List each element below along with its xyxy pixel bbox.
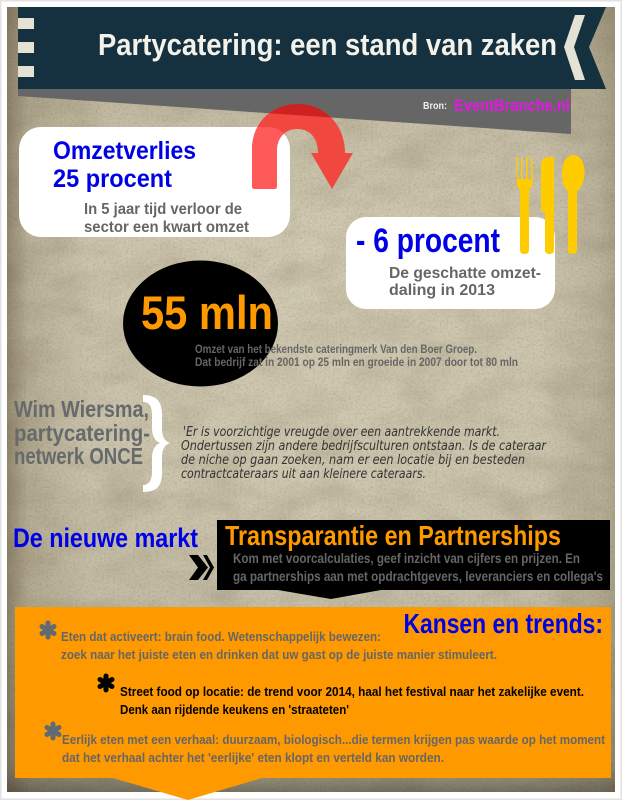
icon: banner chevron [564, 15, 585, 80]
panel: kansen en trends [15, 607, 611, 800]
heading: transparantie: Transparantie en Partnerships [225, 520, 561, 551]
quote text: Ondertussen zijn andere bedrijfsculturen ontstaan. Is de cateraar [181, 439, 547, 454]
text: van den boer groep: Omzet van het bekendste cateringmerk Van den Boer Groep. [195, 344, 477, 356]
stat: 55 mln: 55 mln [141, 286, 273, 339]
text: street food: Street food op locatie: de trend voor 2014, haal het festival naar het zakelijke event. [120, 684, 584, 699]
heading: omzetverlies: Omzetverlies [53, 137, 196, 165]
text: brain food: zoek naar het juiste eten en drinken dat uw gast op de juiste manier stimuleert. [61, 647, 497, 662]
quote text: de niche op gaan zoeken, nam er een locatie bij en besteden [181, 453, 525, 468]
text: omzetverlies: In 5 jaar tijd verloor de [84, 201, 242, 218]
text: eerlijk eten: dat het verhaal achter het 'eerlijke' eten klopt en verteld kan worden. [62, 750, 444, 765]
source credit: EventBranche.nl [454, 96, 570, 115]
icon: knife [541, 157, 554, 254]
icon: cutlery [516, 155, 584, 254]
text: min 6 procent [389, 265, 541, 299]
icon: fork [516, 157, 532, 254]
heading: wim wiersma [14, 396, 150, 469]
text: van den boer groep: Dat bedrijf zat in 2001 op 25 mln en groeide in 2007 door tot 80 mln [195, 357, 518, 369]
heading: omzetverlies [53, 137, 196, 193]
black circle [123, 260, 278, 386]
panel: transparantie en partnerships [217, 520, 610, 599]
text: omzetverlies: sector een kwart omzet [84, 219, 250, 236]
icon: double chevron [189, 555, 214, 580]
heading: de nieuwe markt: De nieuwe markt [13, 523, 198, 553]
icon: asterisk 3 [47, 724, 59, 738]
text: brain food: Eten dat activeert: brain food. Wetenschappelijk bewezen: [61, 629, 381, 644]
icon: white brace [143, 395, 170, 492]
icon: asterisk 1 [42, 623, 54, 637]
icon: spoon [562, 155, 584, 254]
grey source band [18, 89, 571, 134]
text: min 6 procent: daling in 2013 [389, 282, 495, 299]
text: street food: Denk aan rijdende keukens en 'straateten' [120, 702, 349, 717]
banner stripes [18, 18, 34, 77]
text: street food [120, 684, 584, 717]
heading: wim wiersma: Wim Wiersma, [14, 396, 149, 422]
panel: min 6 procent [346, 217, 555, 309]
title: Partycatering: een stand van zaken [98, 27, 557, 62]
icon: asterisk 2 [100, 676, 112, 690]
quote text: 'Er is voorzichtige vreugde over een aantrekkende markt. [183, 425, 500, 440]
heading: omzetverlies: 25 procent [53, 165, 173, 193]
icon: red curved arrow [252, 104, 353, 189]
text: brain food [61, 629, 497, 662]
text: omzetverlies [84, 201, 250, 236]
source credit: Bron: [423, 101, 447, 112]
title banner [18, 7, 606, 89]
text: van den boer groep [195, 344, 518, 369]
heading: wim wiersma: netwerk ONCE [14, 443, 143, 469]
heading: min 6 procent: - 6 procent [356, 222, 500, 260]
text: min 6 procent: De geschatte omzet- [389, 265, 541, 282]
quote text [181, 425, 547, 482]
text: transparantie [233, 550, 603, 584]
text: eerlijk eten [62, 732, 606, 765]
heading: wim wiersma: partycatering- [14, 420, 150, 446]
panel: omzetverlies [19, 127, 290, 237]
quote text: contractcateraars uit aan kleinere cateraars. [181, 467, 426, 482]
